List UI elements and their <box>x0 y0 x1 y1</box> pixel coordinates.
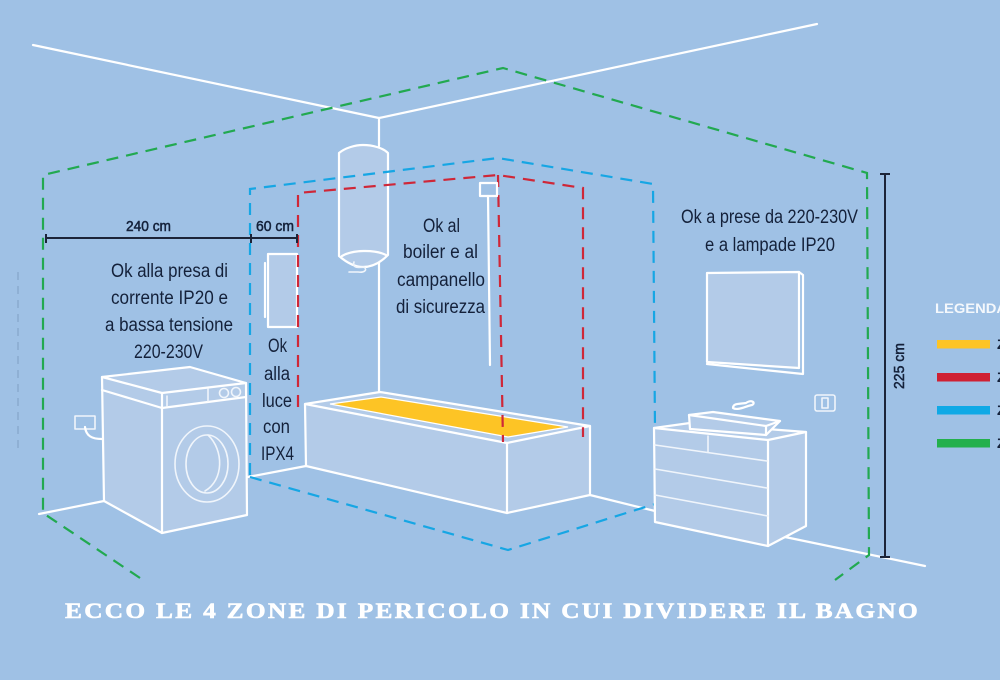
label: boiler and bell: campanello <box>397 270 485 291</box>
washing machine <box>102 367 247 533</box>
water boiler <box>339 145 388 272</box>
safety bell with pull cord <box>480 183 497 365</box>
label: boiler and bell: di sicurezza <box>396 297 485 318</box>
green zone 3 boundary <box>43 68 869 580</box>
label: zone 3 right: e a lampade IP20 <box>705 235 835 256</box>
label: boiler and bell <box>396 216 485 318</box>
label: light IPX4 <box>261 336 294 465</box>
wall switch <box>815 395 835 411</box>
label: light IPX4: alla <box>264 364 290 385</box>
legend <box>935 300 1000 451</box>
socket with cable <box>75 416 102 439</box>
label: light IPX4: Ok <box>268 336 287 357</box>
label: light IPX4: luce <box>262 391 292 412</box>
mirror <box>707 272 803 374</box>
label: zone 3 left <box>105 261 233 363</box>
label: boiler and bell: Ok al <box>423 216 460 237</box>
room outline: ceiling, corner and floor lines <box>33 24 925 566</box>
label: zone 3 left: a bassa tensione <box>105 315 233 336</box>
bathroom cabinet with sink <box>654 401 806 546</box>
blue zone 2 boundary <box>250 158 655 550</box>
dimension: 240 cm and 60 cm <box>46 218 297 243</box>
label: zone 3 right: Ok a prese da 220-230V <box>681 207 858 228</box>
label: light IPX4: IPX4 <box>261 444 294 465</box>
dimension: 240 cm and 60 cm: 240 cm <box>126 218 171 235</box>
dimension: 240 cm and 60 cm: 60 cm <box>256 218 294 235</box>
wall light <box>265 254 297 327</box>
red zone 1 boundary <box>298 175 583 442</box>
dimension: 225 cm: 225 cm <box>891 343 908 389</box>
label: zone 3 left: corrente IP20 e <box>111 288 228 309</box>
title: ECCO LE 4 ZONE DI PERICOLO IN CUI DIVIDERE IL BAGNO <box>65 598 920 623</box>
label: boiler and bell: boiler e al <box>403 242 478 263</box>
label: light IPX4: con <box>263 417 290 438</box>
yellow zone 0 inside tub <box>330 397 568 437</box>
label: zone 3 left: Ok alla presa di <box>111 261 228 282</box>
label: zone 3 right <box>681 207 858 256</box>
bathtub <box>305 392 590 513</box>
label: zone 3 left: 220-230V <box>134 342 203 363</box>
